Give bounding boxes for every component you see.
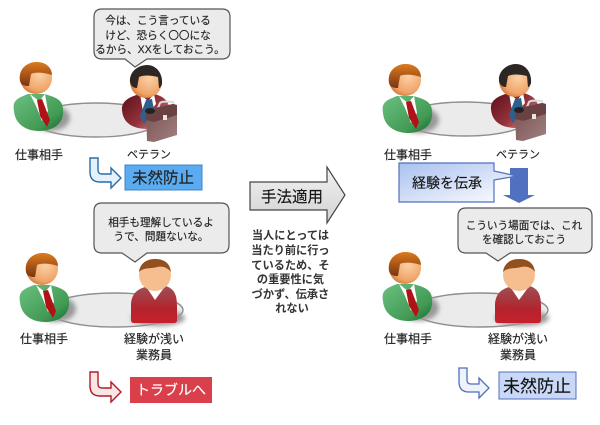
speech bubble: employee confirms: こういう場面では、これ xyxy=(466,219,583,232)
icon: inexperienced employee xyxy=(495,259,549,326)
badge: prevention light blue xyxy=(499,372,576,399)
label: inexperienced employee: 経験が浅い xyxy=(124,331,184,346)
ellipse: bottom right table xyxy=(412,293,548,327)
text: note on knowledge transfer: ているため、そ xyxy=(251,259,330,272)
callout: pass on experience xyxy=(399,163,517,202)
speech bubble: veteran thought: 今は、こう言っている xyxy=(105,14,211,27)
text: note on knowledge transfer: づかず、伝承さ xyxy=(252,287,329,301)
badge: to trouble: トラブルへ xyxy=(136,382,206,398)
speech bubble: employee thought: 相手も理解しているよ xyxy=(108,216,214,229)
speech bubble: veteran thought: るから、XXをしておこう。 xyxy=(95,44,225,56)
badge: to trouble xyxy=(130,377,212,403)
label: business partner: 仕事相手 xyxy=(384,332,432,346)
label: business partner: 仕事相手 xyxy=(15,148,63,162)
speech bubble: employee confirms xyxy=(458,208,592,261)
label: inexperienced employee: 業務員 xyxy=(500,348,536,362)
arrow: method applied xyxy=(250,167,345,223)
arrow: red bent arrow xyxy=(90,372,121,402)
speech bubble: employee thought xyxy=(94,203,229,262)
arrow: light blue bent arrow xyxy=(459,368,489,398)
arrow: blue bent arrow xyxy=(90,158,121,188)
icon: green business partner xyxy=(383,252,439,321)
ellipse: bottom left table xyxy=(47,293,183,327)
ellipse: top left table xyxy=(32,103,160,137)
text: note on knowledge transfer: 当人にとっては xyxy=(252,228,329,242)
badge: prevention blue: 未然防止 xyxy=(132,169,194,187)
callout: pass on experience: 経験を伝承 xyxy=(412,175,482,191)
icon: green business partner xyxy=(20,253,76,322)
group: top left scene xyxy=(14,9,230,190)
arrow: method applied: 手法適用 xyxy=(261,188,323,206)
label: inexperienced employee: 経験が浅い xyxy=(488,331,548,346)
icon: inexperienced employee xyxy=(131,259,185,326)
group: bottom right scene xyxy=(383,208,592,399)
group: center arrow and note xyxy=(250,167,345,315)
badge: prevention blue xyxy=(125,165,202,190)
icon: green business partner xyxy=(383,64,439,133)
text: note on knowledge transfer: の重要性に気 xyxy=(257,272,324,286)
group: top right scene xyxy=(383,64,546,203)
label: inexperienced employee: 業務員 xyxy=(136,348,172,362)
text: note on knowledge transfer: 当たり前に行っ xyxy=(251,243,330,257)
group: bottom left scene xyxy=(20,203,229,403)
badge: prevention light blue: 未然防止 xyxy=(503,377,571,396)
icon: veteran with briefcase xyxy=(122,65,177,142)
icon: green business partner xyxy=(14,62,70,131)
ellipse: top right table xyxy=(401,102,529,136)
label: veteran: ベテラン xyxy=(127,149,171,161)
arrow: blue down arrow xyxy=(503,168,535,203)
speech bubble: employee thought: うで、問題ないな。 xyxy=(114,231,208,243)
icon: veteran with briefcase xyxy=(491,64,546,141)
text: note on knowledge transfer: れない xyxy=(275,302,309,315)
speech bubble: veteran thought: けど、恐らく〇〇にな xyxy=(105,30,211,42)
label: veteran: ベテラン xyxy=(496,149,540,161)
speech bubble: veteran thought xyxy=(94,9,230,67)
label: business partner: 仕事相手 xyxy=(384,148,432,162)
label: business partner: 仕事相手 xyxy=(20,332,68,346)
speech bubble: employee confirms: を確認しておこう xyxy=(482,233,566,246)
